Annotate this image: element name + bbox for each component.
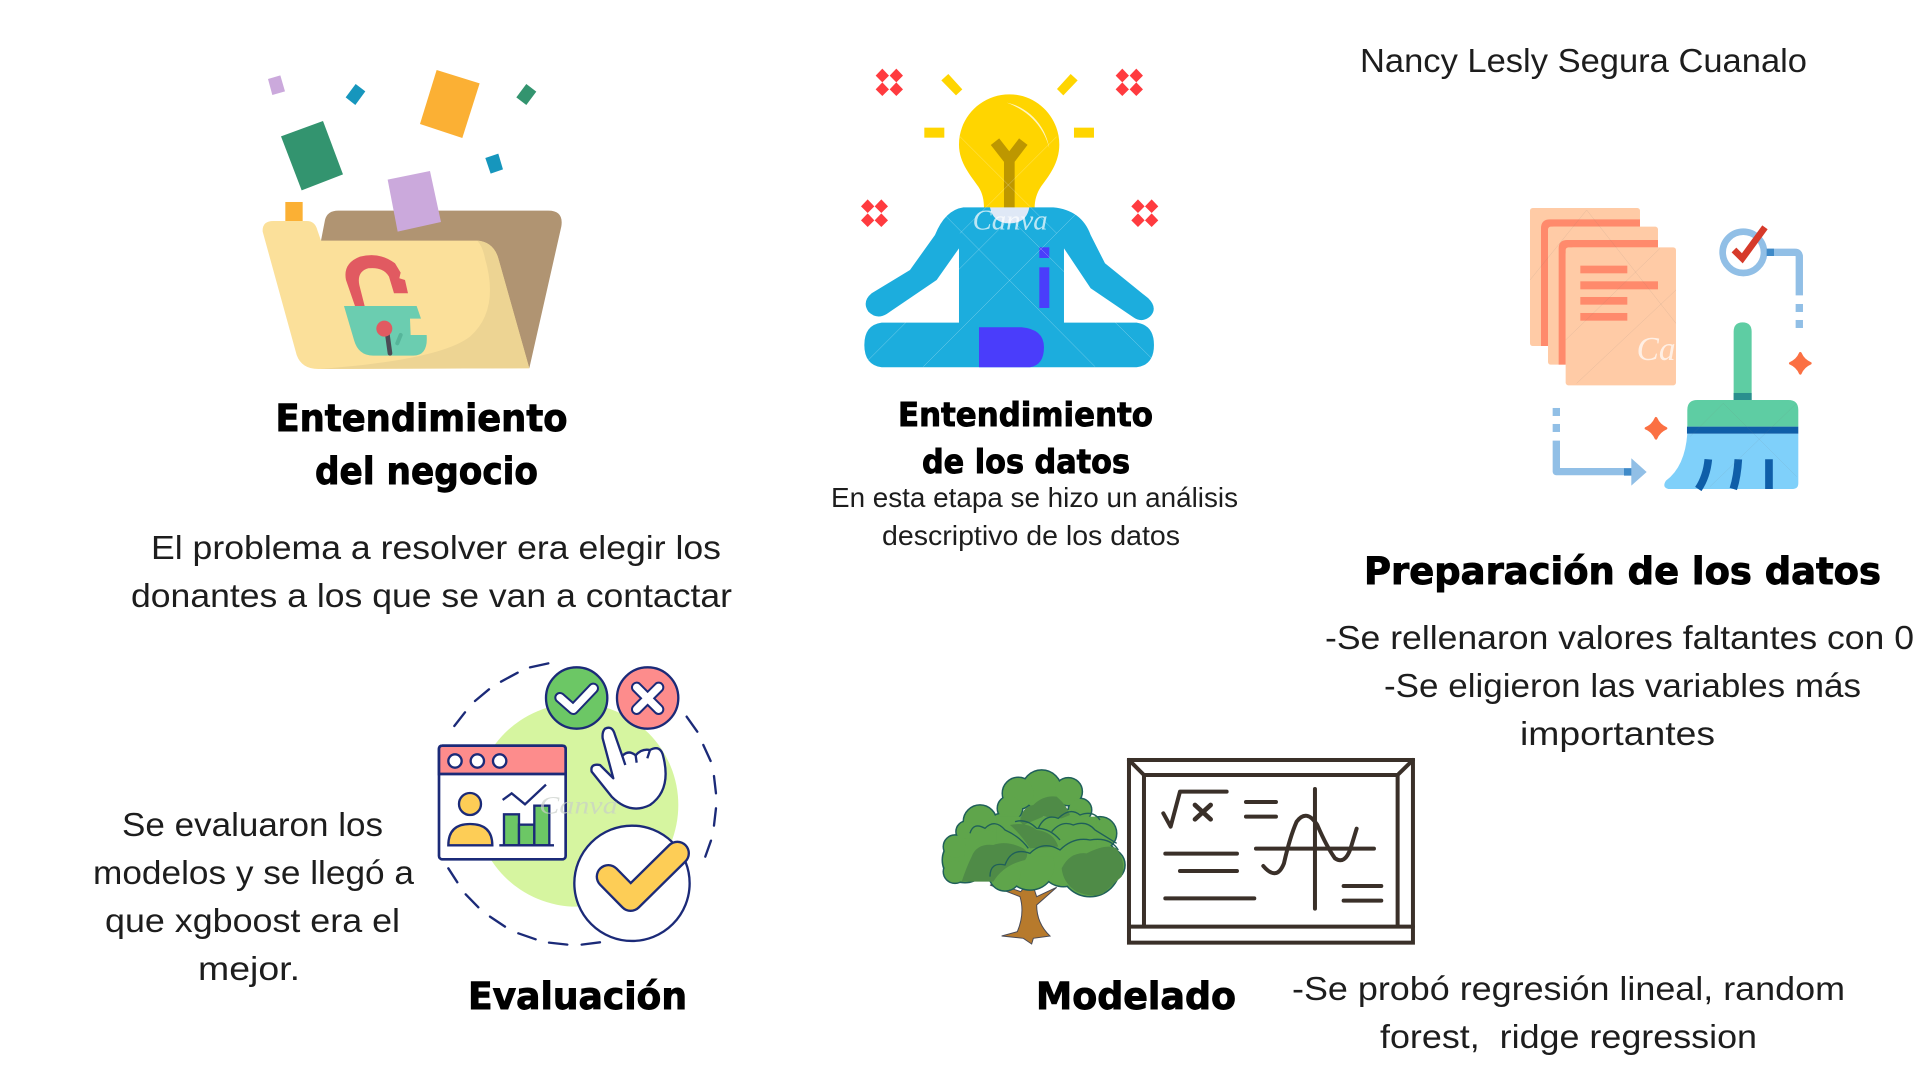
text: negocio description: El problema a resolver era elegir los	[151, 529, 721, 566]
watermark: Canva	[539, 791, 618, 819]
text: datos description	[831, 482, 1238, 551]
text: preparacion description: importantes	[1520, 715, 1715, 752]
text: evaluacion description	[93, 806, 415, 987]
heading: entendimiento del negocio: del negocio	[315, 450, 538, 493]
text: modelado description: forest, ridge regression	[1380, 1018, 1757, 1055]
text: datos description: descriptivo de los datos	[882, 520, 1180, 551]
panel: modelado	[942, 760, 1845, 1055]
icon: documents and broom	[1530, 208, 1810, 489]
heading: entendimiento de los datos: Entendimiento	[898, 395, 1153, 434]
text: preparacion description: -Se eligieron las variables más	[1384, 667, 1861, 704]
text: negocio description: donantes a los que se van a contactar	[131, 577, 732, 614]
heading: entendimiento de los datos	[898, 395, 1153, 481]
text: datos description: En esta etapa se hizo un análisis	[831, 482, 1238, 513]
heading: evaluacion: Evaluación	[468, 975, 687, 1018]
text: negocio description	[131, 529, 732, 614]
heading: entendimiento del negocio	[276, 397, 568, 493]
text: evaluacion description: Se evaluaron los	[122, 806, 383, 843]
text: modelado description	[1292, 970, 1845, 1055]
text: evaluacion description: modelos y se llegó a	[93, 854, 415, 891]
icon: meditating person with light bulb head	[861, 69, 1160, 367]
text: evaluacion description: que xgboost era el	[105, 902, 400, 939]
heading: entendimiento del negocio: Entendimiento	[276, 397, 568, 440]
heading: preparacion de los datos: Preparación de los datos	[1364, 550, 1881, 593]
icon: blackboard with formulas and graph	[1129, 760, 1413, 943]
watermark: Ca	[1637, 331, 1676, 368]
text: preparacion description	[1325, 619, 1914, 752]
panel: preparacion de los datos	[1325, 208, 1914, 752]
heading: modelado: Modelado	[1036, 975, 1236, 1018]
author name: Nancy Lesly Segura Cuanalo	[1360, 42, 1807, 79]
panel: entendimiento del negocio	[131, 70, 732, 614]
icon: tree	[942, 770, 1125, 944]
icon: open folder with lock and paper squares	[263, 70, 562, 369]
watermark: Canva	[973, 205, 1048, 236]
text: modelado description: -Se probó regresión lineal, random	[1292, 970, 1845, 1007]
text: preparacion description: -Se rellenaron valores faltantes con 0	[1325, 619, 1914, 656]
text: evaluacion description: mejor.	[198, 950, 300, 987]
panel: entendimiento de los datos	[831, 69, 1238, 551]
heading: entendimiento de los datos: de los datos	[922, 442, 1130, 481]
icon: evaluation dashboard with checks	[439, 663, 716, 945]
panel: evaluacion	[93, 663, 716, 1018]
